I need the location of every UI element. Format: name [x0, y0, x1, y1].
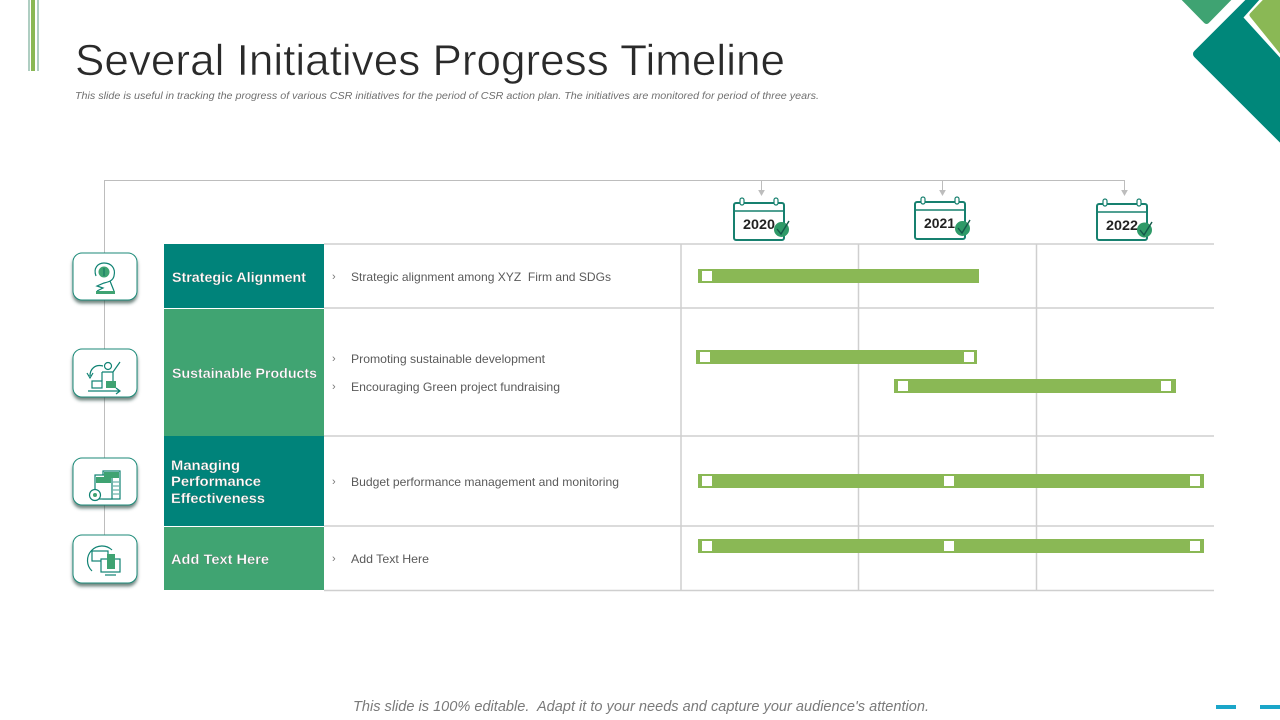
- year marker 2022: [1097, 199, 1152, 240]
- description: Sustainable Products: ›: [332, 381, 336, 393]
- year marker 2021: 2021: [924, 215, 955, 231]
- icon: person with products: [73, 349, 137, 397]
- year marker 2021: [915, 197, 970, 239]
- gantt bars: Sustainable Products: [696, 350, 1176, 393]
- title: Several Initiatives Progress Timeline: [75, 36, 785, 85]
- row: Sustainable Products: [164, 309, 1176, 436]
- description: Budget performance: Budget performance management and monitoring: [351, 475, 619, 489]
- category: Managing Performance Effectiveness: Managing: [171, 457, 240, 473]
- category: Strategic Alignment: Strategic Alignment: [172, 269, 306, 285]
- description: Strategic Alignment: ›: [332, 271, 336, 283]
- row: Strategic Alignment: [164, 244, 979, 308]
- gantt bar: Add Text Here: [698, 539, 1204, 553]
- subtitle: This slide is useful in tracking the progress of various CSR initiatives for the period of CSR action plan. The initiatives are monitored for period of three years.: [75, 90, 819, 102]
- description: Add Text Here: Add Text Here: [351, 552, 429, 566]
- category: Strategic Alignment: [164, 244, 324, 308]
- category: Sustainable Products: [164, 309, 324, 436]
- category: Managing Performance Effectiveness: Performance: [171, 473, 261, 489]
- category: Sustainable Products: Sustainable Products: [172, 365, 317, 381]
- description: Sustainable Products: Encouraging Green project fundraising: [351, 380, 560, 394]
- timeline connector lines: [104, 180, 1127, 560]
- description: Budget performance: ›: [332, 476, 336, 488]
- year marker 2022: 2022: [1106, 217, 1138, 233]
- accent bars top left: [28, 0, 38, 71]
- description: Sustainable Products: [332, 352, 560, 394]
- description: Add Text Here: ›: [332, 553, 336, 565]
- corner decoration top right: [1180, 0, 1280, 147]
- description: Strategic Alignment: Strategic alignment among XYZ Firm and SDGs: [351, 270, 611, 284]
- category: Add Text Here: [164, 527, 324, 590]
- category: Managing Performance Effectiveness: [164, 436, 324, 526]
- description: Sustainable Products: Promoting sustainable development: [351, 352, 546, 366]
- icon: devices cycle: [73, 535, 137, 583]
- category: Add Text Here: Add Text Here: [171, 551, 269, 567]
- page markers: [1216, 705, 1280, 709]
- row: Add Text Here: [164, 527, 1204, 590]
- table grid lines: [324, 244, 1214, 590]
- gantt bar: Strategic Alignment: [698, 269, 979, 283]
- icon: head with idea: [73, 253, 137, 300]
- footer note: This slide is 100% editable. Adapt it to your needs and capture your audience's attention.: [353, 699, 929, 715]
- description: Sustainable Products: ›: [332, 353, 336, 365]
- row: Managing Performance Effectiveness: [164, 436, 1204, 526]
- year marker 2020: [734, 198, 789, 240]
- category: Managing Performance Effectiveness: Effectiveness: [171, 490, 265, 506]
- icon: documents and target: [73, 458, 137, 505]
- gantt bar: Managing Performance Effectiveness: [698, 474, 1204, 488]
- year marker 2020: 2020: [743, 216, 775, 232]
